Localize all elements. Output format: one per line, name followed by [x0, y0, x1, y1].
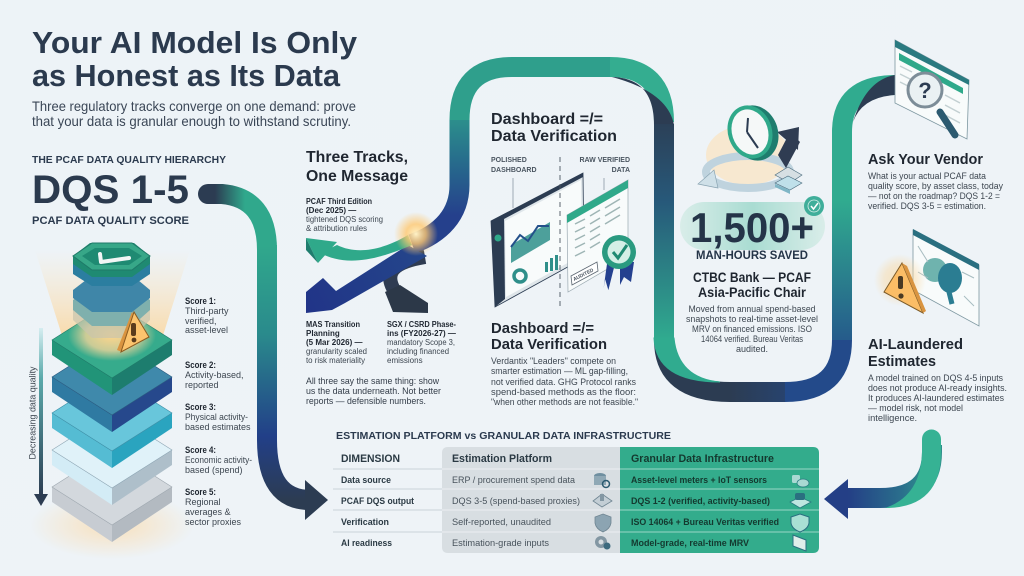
stat: 1,500+ man-hours saved	[680, 196, 825, 262]
text: MAS transition planning: MAS Transition	[306, 320, 360, 329]
text: AI-laundered paragraph: It produces AI-laundered estimates	[868, 393, 1004, 403]
layer: score 2	[52, 339, 172, 432]
text: CTBC paragraph: Moved from annual spend-based	[688, 304, 816, 314]
text: AI-laundered paragraph	[868, 373, 1007, 423]
flare	[394, 212, 438, 256]
text: verdantix paragraph: "when other methods are not feasible."	[491, 397, 638, 407]
title	[32, 25, 358, 93]
text: ask your vendor: What is your actual PCAF data	[868, 171, 987, 181]
text: PCAF third edition: tightened DQS scoring	[306, 215, 383, 224]
panel: three tracks heading	[306, 149, 408, 185]
text: SGX CSRD phase-ins: ins (FY2026-27) —	[387, 329, 456, 338]
layer: score 5	[52, 449, 172, 542]
text: AI-laundered paragraph: A model trained on DQS 4-5 inputs	[868, 373, 1003, 383]
score 3 label: Score 3:	[185, 402, 216, 412]
row: data source	[341, 475, 767, 485]
icon: warning triangle	[117, 312, 149, 352]
heading: AI-laundered estimates: AI-Laundered	[868, 336, 963, 353]
text: ask your vendor: verified. DQS 3-5 = estimation.	[868, 201, 986, 211]
score 3 label: based estimates	[185, 422, 251, 432]
score 2 label: reported	[185, 380, 219, 390]
text: MAS transition planning: Planning	[306, 329, 340, 338]
row: AI readiness: AI readiness	[341, 538, 392, 548]
score 4 label: based (spend)	[185, 465, 243, 475]
panel: PCAF hierarchy heading: THE PCAF DATA QUALITY HIERARCHY	[32, 154, 226, 166]
text: SGX CSRD phase-ins: mandatory Scope 3,	[387, 338, 455, 347]
text: all three say the same thing: reports — defensible numbers.	[306, 396, 426, 407]
row: PCAF DQS output: DQS 3-5 (spend-based proxies)	[452, 496, 580, 506]
score 5 label: Score 5:	[185, 487, 216, 497]
score 5 label: averages &	[185, 507, 231, 517]
text: verdantix paragraph: smarter estimation — ML gap-filling,	[491, 366, 628, 376]
row: PCAF DQS output: DQS 1-2 (verified, activity-based)	[631, 496, 770, 506]
text: all three say the same thing	[306, 376, 441, 407]
title: as Honest as Its Data	[32, 58, 341, 93]
labels: polished dashboard and raw data	[491, 157, 630, 174]
panel: PCAF hierarchy heading: DQS 1-5	[32, 168, 189, 212]
score 4 label: Economic activity-	[185, 455, 252, 465]
labels: polished dashboard and raw data: DASHBOARD	[491, 167, 536, 174]
score 3 label	[185, 402, 251, 432]
icon: browser with magnifier: ?	[918, 78, 932, 103]
row: verification: ISO 14064 + Bureau Veritas verified	[631, 517, 779, 527]
text: SGX CSRD phase-ins: emissions	[387, 356, 423, 365]
icon: floating hexagon stack	[73, 243, 150, 338]
illustration: dashboard and verified table	[491, 173, 636, 307]
icon: AI brain panel with warning	[874, 229, 979, 326]
title: Your AI Model Is Only	[32, 25, 358, 60]
row: AI readiness: Model-grade, real-time MRV	[631, 538, 750, 548]
row: AI readiness	[341, 538, 750, 548]
table: comparison	[333, 447, 819, 553]
text: PCAF third edition: & attribution rules	[306, 224, 367, 233]
text: PCAF third edition: PCAF Third Edition	[306, 197, 372, 206]
divider: dashed	[559, 157, 561, 310]
icon: browser with magnifier	[895, 40, 969, 139]
text: verdantix paragraph: not verified data. GHG Protocol ranks	[491, 377, 636, 387]
text: MAS transition planning: to risk materiality	[306, 356, 365, 365]
text: CTBC paragraph: MRV on financed emissions. ISO	[692, 324, 812, 334]
score 4 label: Score 4:	[185, 445, 216, 455]
text: PCAF third edition: (Dec 2025) —	[306, 206, 356, 215]
heading: dashboard vs verification	[491, 111, 617, 145]
score 5 label: Regional	[185, 497, 221, 507]
text: all three say the same thing: All three say the same thing: show	[306, 376, 439, 387]
text: AI-laundered paragraph: — model risk, not model	[868, 403, 963, 413]
heading: CTBC: CTBC Bank — PCAF	[693, 270, 811, 285]
arrow: return ribbon to table	[824, 430, 941, 519]
axis label: Decreasing data quality	[28, 366, 39, 460]
text: AI-laundered paragraph: intelligence.	[868, 413, 917, 423]
text: MAS transition planning	[306, 320, 367, 365]
labels: polished dashboard and raw data: DATA	[612, 167, 630, 174]
heading: CTBC	[693, 270, 811, 300]
heading: dashboard repeat: Dashboard =/=	[491, 320, 594, 337]
subtitle	[32, 98, 356, 129]
score 2 label: Activity-based,	[185, 370, 244, 380]
heading: CTBC: Asia-Pacific Chair	[698, 285, 807, 300]
text: SGX CSRD phase-ins: SGX / CSRD Phase-	[387, 320, 456, 329]
row: AI readiness: Estimation-grade inputs	[452, 538, 549, 548]
layer: score 4	[52, 412, 172, 505]
text: ask your vendor: quality score, by asset class, today	[868, 181, 1003, 191]
arrow: navy MAS	[306, 245, 427, 313]
heading: dashboard vs verification: Dashboard =/=	[491, 111, 603, 128]
heading: dashboard repeat: Data Verification	[491, 336, 607, 353]
chart: data quality stack	[30, 243, 194, 559]
icons: estimation column	[593, 473, 612, 550]
labels: polished dashboard and raw data: RAW VERIFIED	[579, 157, 630, 164]
score 1 label: Score 1:	[185, 296, 216, 306]
text: SGX CSRD phase-ins	[387, 320, 456, 365]
score 1 label	[185, 296, 229, 335]
text: ask your vendor: — not on the roadmap? DQS 1-2 =	[868, 191, 1000, 201]
text: MAS transition planning: (5 Mar 2026) —	[306, 338, 362, 347]
score labels	[185, 296, 252, 527]
icon: three diverging arrows	[306, 212, 438, 313]
column: granular background	[620, 447, 819, 553]
text: all three say the same thing: us the data underneath. Not better	[306, 386, 441, 397]
header row: Granular Data Infrastructure	[631, 453, 774, 465]
header row	[341, 453, 774, 465]
score 5 label	[185, 487, 242, 527]
icons: granular column	[790, 475, 811, 551]
subtitle: Three regulatory tracks converge on one demand: prove	[32, 98, 356, 114]
score 2 label	[185, 360, 244, 390]
icon: check badge	[804, 196, 824, 216]
panel: PCAF hierarchy heading	[32, 154, 226, 227]
arrow: teal PCAF	[306, 235, 412, 263]
text: SGX CSRD phase-ins: including financed	[387, 347, 449, 356]
heading: comparison table: ESTIMATION PLATFORM vs GRANULAR DATA INFRASTRUCTURE	[336, 430, 671, 442]
header row: Estimation Platform	[452, 453, 552, 465]
text: PCAF third edition	[306, 197, 383, 233]
text: CTBC paragraph: audited.	[736, 344, 768, 354]
score 3 label: Physical activity-	[185, 412, 248, 422]
text: ask your vendor	[868, 171, 1003, 211]
row: verification: Self-reported, unaudited	[452, 517, 551, 527]
panel: three tracks heading: Three Tracks,	[306, 149, 408, 166]
arrow: decreasing data quality	[34, 328, 48, 506]
score 5 label: sector proxies	[185, 517, 242, 527]
row: PCAF DQS output	[341, 496, 770, 506]
row: data source: Data source	[341, 475, 391, 485]
panel: three tracks heading: One Message	[306, 168, 408, 185]
arrow: ribbon from DQS to table	[208, 194, 328, 520]
arrow: main ribbon winding across page	[412, 67, 895, 392]
icon: dashboard monitor	[491, 173, 584, 307]
heading: dashboard vs verification: Data Verification	[491, 128, 617, 145]
stat: 1,500+ man-hours saved: MAN-HOURS SAVED	[696, 248, 808, 262]
score 1 label: asset-level	[185, 325, 228, 335]
text: verdantix paragraph	[491, 356, 638, 407]
row: PCAF DQS output: PCAF DQS output	[341, 496, 414, 506]
text: CTBC paragraph: snapshots to real-time asset-level	[686, 314, 818, 324]
labels: polished dashboard and raw data: POLISHED	[491, 157, 527, 164]
row: verification	[341, 517, 779, 527]
text: verdantix paragraph: Verdantix "Leaders" compete on	[491, 356, 616, 366]
icon: clock with cycle arrows	[698, 99, 802, 194]
text: AI-laundered paragraph: does not produce AI-ready insights.	[868, 383, 1007, 393]
panel: PCAF hierarchy heading: PCAF DATA QUALITY SCORE	[32, 215, 189, 227]
heading: AI-laundered estimates: Estimates	[868, 353, 936, 370]
arrow: dark SGX	[385, 257, 428, 313]
text: CTBC paragraph: 14064 verified. Bureau Veritas	[701, 334, 803, 344]
score 2 label: Score 2:	[185, 360, 216, 370]
text: verdantix paragraph: spend-based methods as the floor:	[491, 387, 636, 397]
text: CTBC paragraph	[686, 304, 818, 354]
stat: 1,500+ man-hours saved: 1,500+	[690, 204, 814, 251]
subtitle: that your data is granular enough to withstand scrutiny.	[32, 113, 351, 129]
icon: verified ribbon badge	[602, 235, 636, 290]
score 1 label: Third-party	[185, 306, 229, 316]
row: data source: ERP / procurement spend data	[452, 475, 576, 485]
score 1 label: verified,	[185, 316, 217, 326]
heading: ask your vendor: Ask Your Vendor	[868, 151, 983, 168]
layer: score 1	[52, 302, 172, 395]
heading: dashboard repeat	[491, 320, 607, 353]
header row: DIMENSION	[341, 453, 400, 465]
text: MAS transition planning: granularity scaled	[306, 347, 367, 356]
layer: score 3	[52, 375, 172, 468]
icon: verified data table: AUDITED	[572, 267, 595, 283]
score 4 label	[185, 445, 252, 475]
icon: verified data table	[567, 180, 628, 292]
heading: AI-laundered estimates	[868, 336, 963, 370]
row: verification: Verification	[341, 517, 389, 527]
column: estimation background	[442, 447, 620, 553]
row: data source: Asset-level meters + IoT sensors	[631, 475, 767, 485]
